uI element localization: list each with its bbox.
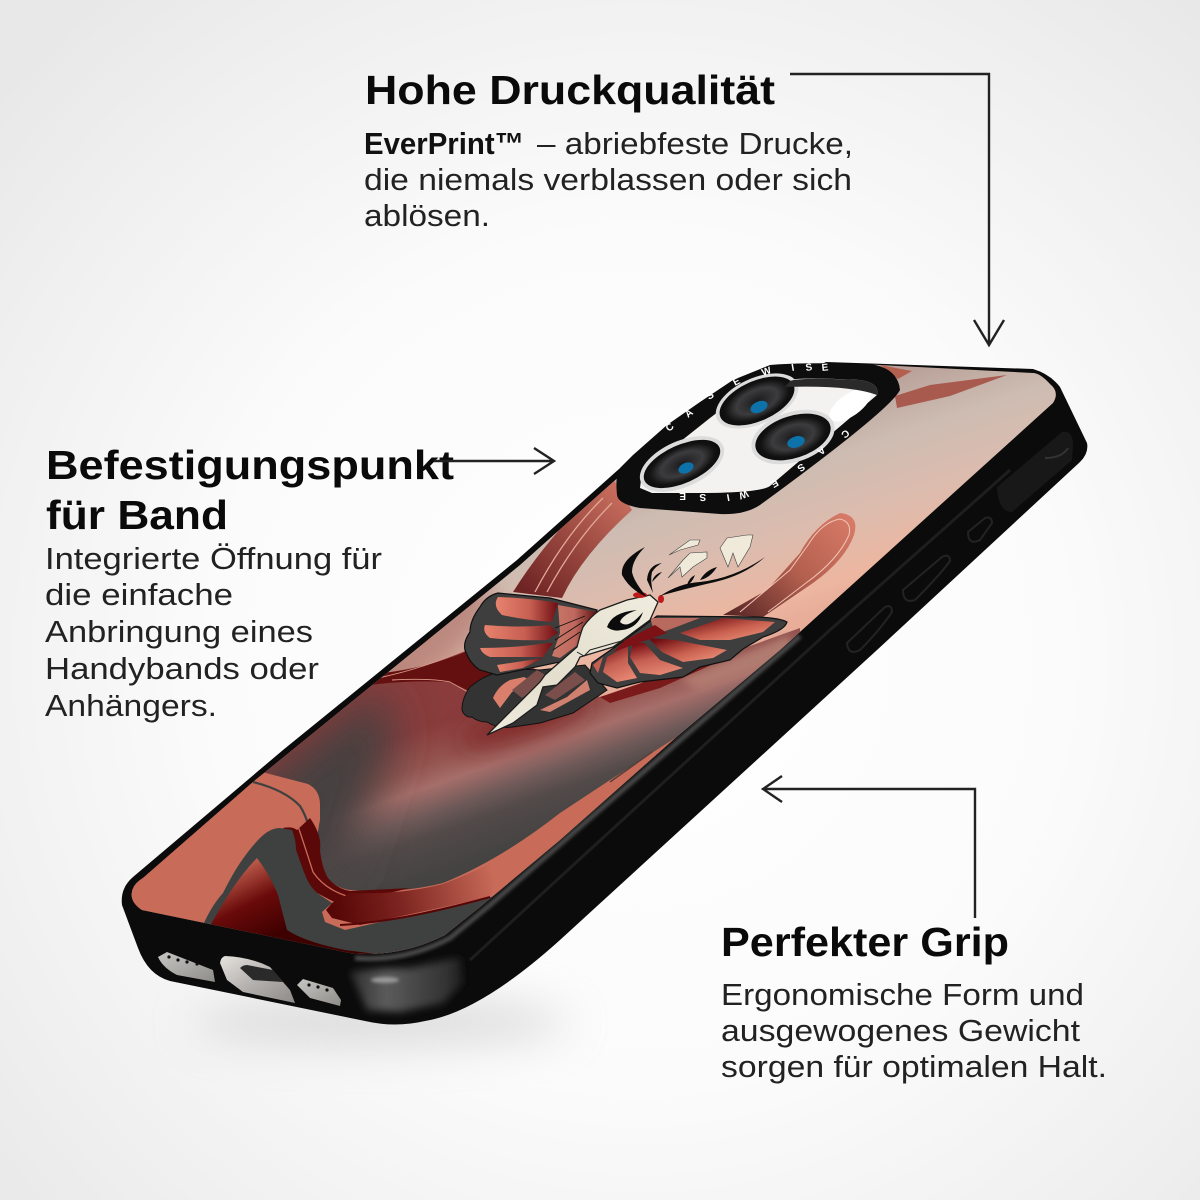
right wing: [590, 616, 787, 688]
band top right: [895, 375, 1007, 408]
salmon lower: [132, 738, 676, 954]
description: die niemals verblassen oder sich: [364, 163, 852, 197]
arrow: grip: [763, 776, 975, 918]
description: [45, 542, 382, 723]
dark red triangle: [211, 858, 376, 954]
description: die einfache: [45, 578, 233, 612]
dark ribbon: [283, 818, 410, 905]
charging port: [220, 956, 295, 1003]
upper left wing: [465, 593, 597, 675]
tongue stripe: [723, 513, 855, 617]
callout: Hohe Druckqualität: [364, 67, 853, 233]
dark red wave: [372, 652, 491, 690]
back panel artwork: [132, 364, 1056, 954]
description: Ergonomische Form und: [721, 978, 1084, 1012]
lower wash: [132, 628, 800, 923]
camera window: [640, 378, 877, 493]
case body: [122, 362, 1087, 1024]
description: Handybands oder: [45, 652, 319, 686]
description: sorgen für optimalen Halt.: [721, 1050, 1107, 1084]
moth artwork: [462, 535, 787, 735]
description: – abriebfeste Drucke,: [537, 127, 853, 161]
description: EverPrint™: [364, 127, 524, 161]
right ribbon: [326, 868, 488, 925]
description: ablösen.: [364, 199, 490, 233]
moth red eyes: [633, 592, 664, 603]
antennae: [622, 547, 765, 597]
ring lettering: CASEWISE: [679, 427, 851, 502]
lens top: [707, 362, 807, 440]
left edge shading: [376, 584, 502, 682]
arrow: lanyard point: [434, 448, 554, 474]
speaker left: [158, 952, 215, 982]
lower left wing: [462, 665, 607, 727]
salmon inner line: [252, 781, 308, 822]
ring lettering: [664, 362, 851, 502]
teeth: [668, 535, 753, 578]
ring lettering: CASEWISE: [664, 362, 829, 434]
phone case: [100, 340, 1100, 1024]
camera ring top shadow: [785, 379, 877, 395]
heading: Perfekter Grip: [721, 919, 1009, 965]
grey wave: [204, 828, 492, 954]
thin scratch lines: [610, 752, 652, 782]
heading: Hohe Druckqualität: [365, 67, 775, 113]
case rim: [355, 636, 800, 959]
heading: Befestigungspunkt: [46, 442, 454, 488]
description: ausgewogenes Gewicht: [721, 1014, 1081, 1048]
callout: Perfekter Grip: [721, 919, 1107, 1084]
lens left: [632, 425, 732, 503]
case corner highlight: [350, 957, 463, 1012]
dark shadow under moth: [453, 685, 597, 759]
side buttons: [847, 432, 1073, 652]
callout: Befestigungspunkt: [45, 442, 454, 723]
band upper left: [513, 477, 632, 598]
moth eye mark: [607, 610, 643, 631]
description: Anhängers.: [45, 689, 217, 723]
arrow: print quality: [790, 74, 1004, 345]
camera bump: [616, 362, 900, 514]
heading: für Band: [46, 492, 228, 538]
moth body: [487, 595, 658, 735]
heading: [46, 442, 454, 538]
left dark shading: [250, 690, 395, 880]
dark band under right wing: [600, 665, 711, 703]
right wing lower shade: [680, 635, 790, 690]
lens right: [744, 400, 842, 474]
description: [721, 978, 1107, 1084]
description: [364, 127, 853, 233]
speaker right: [297, 979, 341, 1006]
description: Integrierte Öffnung für: [45, 542, 382, 576]
phone shadow: [190, 998, 570, 1046]
description: Anbringung eines: [45, 615, 313, 649]
